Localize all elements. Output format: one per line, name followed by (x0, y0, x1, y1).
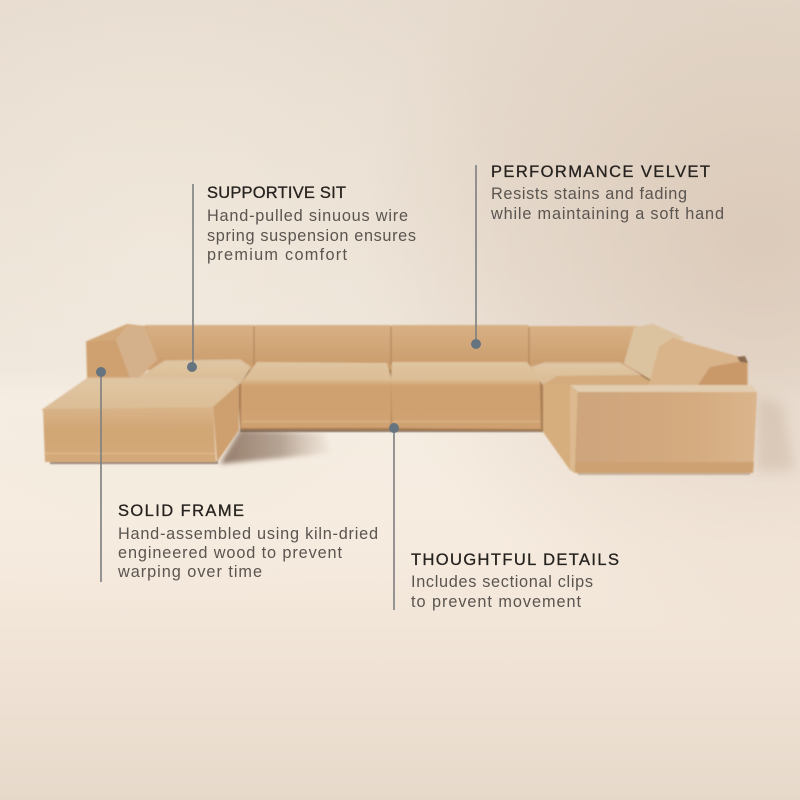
body text (411, 573, 593, 611)
leader line (192, 184, 194, 367)
heading: SOLID FRAME (118, 502, 244, 520)
heading: SUPPORTIVE SIT (207, 184, 346, 202)
body text: spring suspension ensures (207, 227, 416, 245)
sofa illustration (42, 325, 795, 475)
sofa base underlay (138, 362, 660, 470)
left arm (87, 325, 157, 378)
floor shadows (50, 395, 795, 475)
seat cushions (140, 360, 656, 429)
body text: engineered wood to prevent (118, 544, 342, 562)
ottoman (42, 378, 239, 462)
body text: to prevent movement (411, 593, 581, 611)
body text: warping over time (117, 563, 262, 581)
body text: premium comfort (207, 246, 347, 264)
dot (471, 339, 481, 349)
body text: Resists stains and fading (491, 185, 687, 203)
back cushions (145, 325, 639, 371)
dot (187, 362, 197, 372)
callout: supportive sit (187, 184, 416, 372)
heading: THOUGHTFUL DETAILS (411, 551, 619, 569)
leader line (475, 165, 477, 344)
body text: while maintaining a soft hand (490, 205, 724, 223)
body text (490, 185, 724, 223)
heading: PERFORMANCE VELVET (491, 163, 710, 181)
callout: performance velvet (471, 163, 724, 349)
callout: thoughtful details (389, 423, 619, 611)
right arm and end panel (543, 325, 757, 473)
body text: Hand-assembled using kiln-dried (118, 525, 378, 543)
callout: solid frame (96, 367, 378, 582)
body text (117, 525, 378, 581)
leader line (100, 371, 102, 582)
leader line (393, 428, 395, 610)
dot (389, 423, 399, 433)
dot (96, 367, 106, 377)
body text: Hand-pulled sinuous wire (207, 207, 408, 225)
body text: Includes sectional clips (411, 573, 593, 591)
body text (207, 207, 416, 264)
